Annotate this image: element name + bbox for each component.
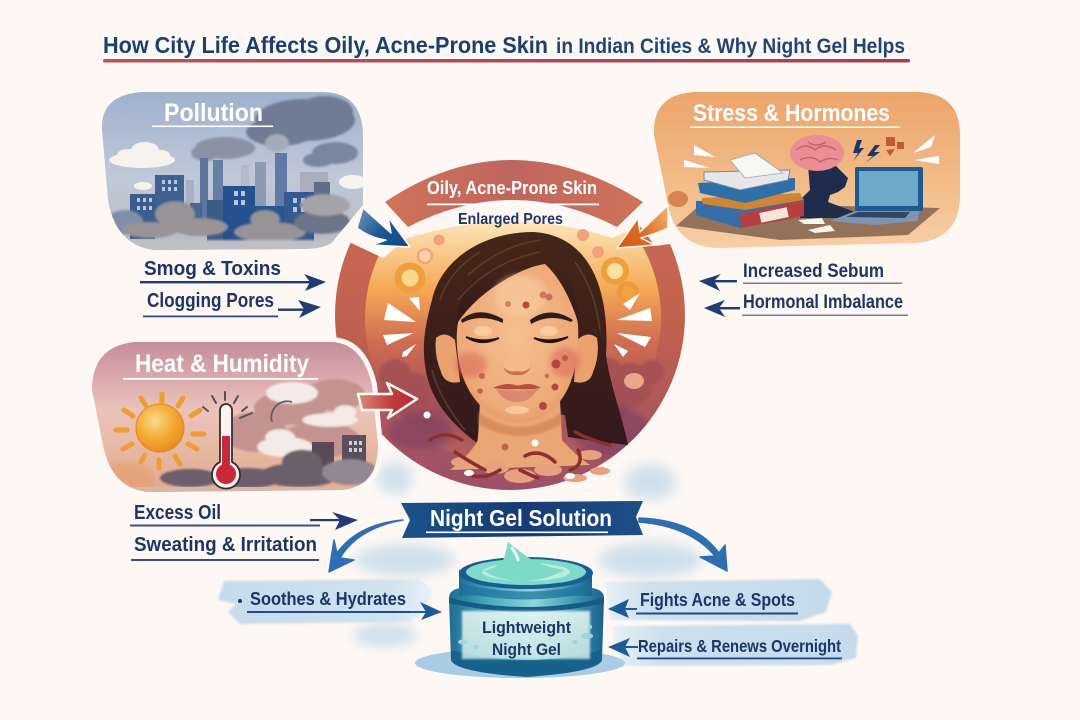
sub: laptop (798, 167, 923, 233)
sub: jar label: Lightweight (482, 618, 571, 637)
panel: central skin circle (335, 160, 685, 490)
panel: pollution (100, 92, 367, 252)
arrow: curved right (639, 518, 727, 571)
watercolor backdrop around the jar (353, 462, 702, 647)
banner: night gel solution: Night Gel Solution (430, 505, 612, 531)
sub: stress heading: Stress & Hormones (693, 100, 890, 127)
title: How City Life Affects Oily, Acne-Prone Skin (103, 32, 548, 58)
arrow: fights acne (608, 599, 637, 618)
strip: fights acne: Fights Acne & Spots (640, 590, 795, 610)
sub: person with brain (668, 135, 939, 218)
arrow: excess oil (310, 512, 358, 530)
sub: city silhouette (312, 435, 366, 467)
sub: heat heading: Heat & Humidity (135, 350, 309, 378)
text block: pollution effects: Smog & Toxins (144, 257, 281, 280)
text block: stress effects (699, 260, 908, 317)
title: in Indian Cities & Why Night Gel Helps (556, 35, 905, 58)
sub: factory skyline (130, 153, 330, 248)
sub: smoke clouds (109, 96, 367, 190)
strip: soothes and hydrates (218, 579, 442, 624)
sub: glow decorations (383, 229, 652, 357)
title (103, 32, 910, 62)
sub: ground smog (160, 450, 378, 488)
panel: heat and humidity (92, 342, 380, 498)
sub: jar label (482, 618, 571, 659)
banner: night gel solution (401, 501, 643, 538)
sub: desk (676, 203, 940, 240)
sub: thermometer (203, 392, 252, 489)
arrow: heat to skin (358, 383, 417, 418)
icon: night gel jar (415, 542, 625, 678)
strip: repairs and renews: Repairs & Renews Overnight (638, 636, 841, 656)
text block: pollution effects: Clogging Pores (147, 289, 274, 312)
sub: top arc banner: Oily, Acne-Prone Skin (427, 177, 597, 198)
text block: heat effects (130, 502, 358, 561)
arrow: clogging (278, 300, 321, 318)
sub: top arc banner (385, 160, 643, 228)
strip: repairs and renews (608, 624, 858, 666)
sub: skin texture at neckline (424, 412, 610, 483)
sub: top arc banner: Enlarged Pores (458, 211, 563, 228)
text block: stress effects: Hormonal Imbalance (743, 291, 903, 313)
arrow: repairs (608, 638, 638, 657)
arrow: pollution to skin (357, 208, 410, 247)
strip: soothes and hydrates: Soothes & Hydrates (250, 589, 406, 609)
sub: pollution heading: Pollution (164, 99, 263, 127)
sub: jar label: Night Gel (492, 640, 561, 659)
text block: pollution effects (140, 257, 326, 318)
text block: heat effects: Excess Oil (134, 502, 221, 524)
arrow: curved left (329, 520, 403, 572)
arrow: sebum (699, 274, 737, 291)
arrow: soothes (410, 602, 442, 620)
arrow: hormonal (704, 300, 740, 317)
sub: sun (116, 394, 204, 468)
sub: stacked books (696, 153, 804, 228)
sub: clouds and haze (223, 379, 365, 458)
text block: heat effects: Sweating & Irritation (134, 534, 317, 556)
sub: woman's face (424, 232, 628, 470)
text block: stress effects: Increased Sebum (743, 260, 884, 282)
strip: fights acne (605, 579, 832, 621)
arrow: stress to skin (617, 205, 668, 248)
arrow: smog (140, 274, 326, 291)
panel: stress and hormones (654, 92, 960, 248)
sub: ground smog (100, 194, 350, 252)
